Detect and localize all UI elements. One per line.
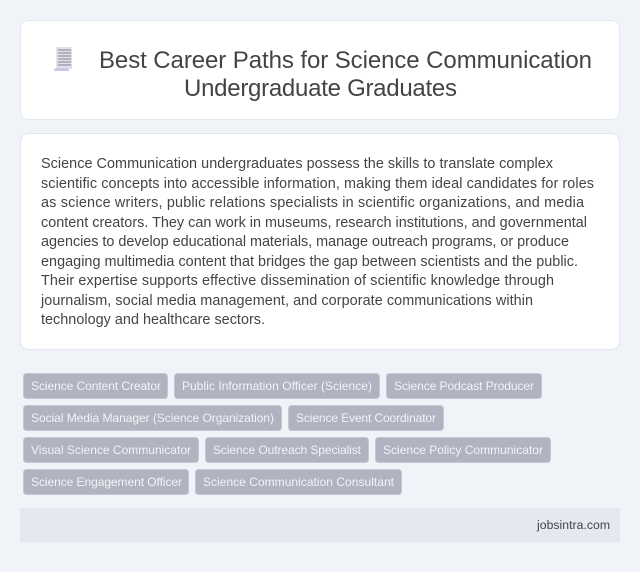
tag: Science Podcast Producer: Science Podcast Producer bbox=[394, 379, 534, 393]
tag: Science Engagement Officer: Science Engagement Officer bbox=[31, 475, 182, 489]
tag: Visual Science Communicator bbox=[24, 438, 198, 462]
tag: Science Podcast Producer bbox=[386, 374, 542, 398]
tag: Science Event Coordinator: Science Event Coordinator bbox=[296, 411, 436, 425]
title: Best Career Paths for Science Communication bbox=[99, 47, 592, 74]
tag: Science Communication Consultant bbox=[196, 470, 402, 494]
title: Undergraduate Graduates bbox=[184, 75, 457, 102]
text block: description: technology and healthcare sectors. bbox=[41, 312, 265, 328]
tag: Science Event Coordinator bbox=[288, 406, 444, 430]
tag: Social Media Manager: Social Media Manager (Science Organization) bbox=[31, 411, 274, 425]
text block: description: as science writers, public relations specialists in scientific organizations, and media bbox=[41, 195, 584, 211]
tag: Science Policy Communicator: Science Policy Communicator bbox=[383, 443, 543, 457]
tag: Science Outreach Specialist bbox=[206, 438, 368, 462]
footer text: jobsintra.com: jobsintra.com bbox=[536, 518, 610, 532]
text block: description: journalism, social media management, and corporate communications within bbox=[40, 293, 533, 309]
tag: Science Policy Communicator bbox=[376, 438, 550, 462]
tag: Social Media Manager bbox=[24, 406, 282, 430]
tag: Visual Science Communicator: Visual Science Communicator bbox=[31, 443, 191, 457]
tag: Public Information Officer (Science): Public Information Officer (Science) bbox=[182, 379, 372, 393]
tag: Public Information Officer (Science) bbox=[174, 374, 380, 398]
text block: description: Science Communication undergraduates possess the skills to translate complex bbox=[41, 156, 554, 172]
footer bar bbox=[20, 508, 620, 542]
text block: description: Their expertise supports effective dissemination of scientific knowledge through bbox=[41, 273, 554, 289]
tag: Science Outreach Specialist: Science Outreach Specialist bbox=[213, 443, 362, 457]
tag: Science Content Creator: Science Content Creator bbox=[31, 379, 161, 393]
text block: description: content creators. They can work in museums, research institutions, and governmental bbox=[41, 215, 587, 231]
tag: Science Engagement Officer bbox=[24, 470, 188, 494]
title bbox=[99, 47, 592, 102]
tag: Science Content Creator bbox=[24, 374, 168, 398]
text block: description bbox=[40, 156, 594, 328]
text block: description: scientific concepts into accessible information, making them ideal candidates for roles bbox=[41, 176, 594, 192]
text block: description: agencies to develop educational materials, manage outreach programs, or produce bbox=[41, 234, 569, 250]
panel: title card bbox=[20, 20, 620, 120]
text block: description: engaging multimedia content that bridges the gap between scientists and the public. bbox=[41, 254, 578, 270]
panel: description bbox=[20, 134, 620, 350]
icon: document scroll bbox=[54, 47, 72, 71]
tag: Science Communication Consultant: Science Communication Consultant bbox=[203, 475, 395, 489]
